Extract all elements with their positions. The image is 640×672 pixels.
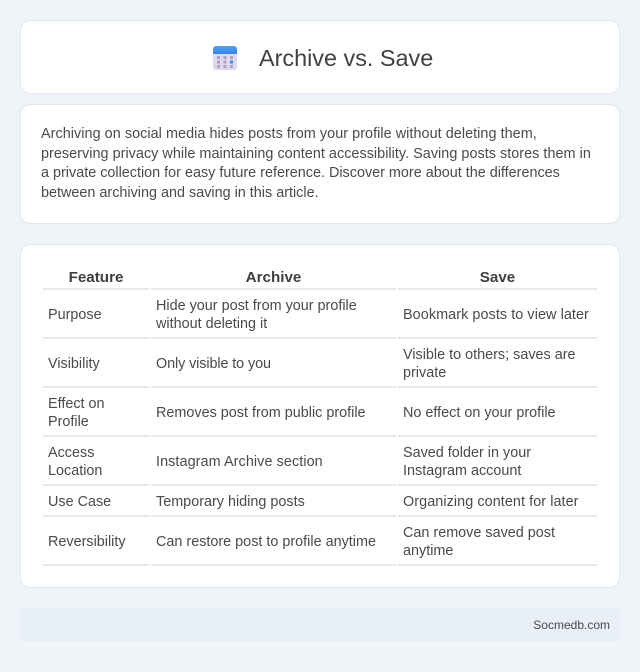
row: effect on profile: Removes post from public profile	[156, 405, 366, 421]
intro text	[41, 126, 591, 201]
row: purpose: without deleting it	[156, 316, 267, 332]
icon: calendar	[213, 46, 237, 70]
row: reversibility	[48, 525, 555, 559]
row: visibility	[48, 347, 576, 381]
table card	[20, 244, 620, 588]
row: access location: Instagram Archive section	[156, 454, 323, 470]
row: effect on profile: No effect on your profile	[403, 405, 556, 421]
row: reversibility: Can remove saved post	[403, 525, 555, 541]
row: reversibility: Can restore post to profile anytime	[156, 534, 376, 550]
table header: Feature	[69, 269, 123, 286]
row: visibility: Visible to others; saves are	[403, 347, 576, 363]
row: access location: Saved folder in your	[403, 445, 531, 461]
row: visibility: private	[403, 365, 446, 381]
row: purpose: Bookmark posts to view later	[403, 307, 589, 323]
row: effect on profile: Profile	[48, 414, 89, 430]
row: purpose	[48, 298, 589, 332]
intro text: a private collection for easy future reference. Discover more about the differences	[41, 165, 560, 181]
row: visibility: Visibility	[48, 356, 100, 372]
row: access location	[48, 445, 531, 479]
intro text: between archiving and saving in this article.	[41, 185, 319, 201]
table	[43, 269, 597, 566]
row: effect on profile: Effect on	[48, 396, 105, 412]
intro text: preserving privacy while maintaining content accessibility. Saving posts stores them in	[41, 146, 591, 162]
row: use case: Temporary hiding posts	[156, 494, 305, 510]
footer text: Socmedb.com	[533, 618, 610, 632]
row: access location: Instagram account	[403, 463, 521, 479]
row: reversibility: Reversibility	[48, 534, 126, 550]
row: purpose: Purpose	[48, 307, 102, 323]
row: effect on profile	[48, 396, 556, 430]
footer bar	[20, 608, 620, 642]
row: use case	[48, 494, 579, 510]
row: use case: Use Case	[48, 494, 111, 510]
table header	[69, 269, 515, 286]
row: purpose: Hide your post from your profile	[156, 298, 357, 314]
row: visibility: Only visible to you	[156, 356, 271, 372]
row: use case: Organizing content for later	[403, 494, 579, 510]
intro text: Archiving on social media hides posts from your profile without deleting them,	[41, 126, 537, 142]
table header: Save	[480, 269, 515, 286]
row: access location: Access	[48, 445, 94, 461]
header card	[20, 20, 620, 94]
table header: Archive	[246, 269, 301, 286]
intro card	[20, 104, 620, 224]
title: Archive vs. Save	[259, 45, 433, 71]
row: access location: Location	[48, 463, 102, 479]
row: reversibility: anytime	[403, 543, 453, 559]
